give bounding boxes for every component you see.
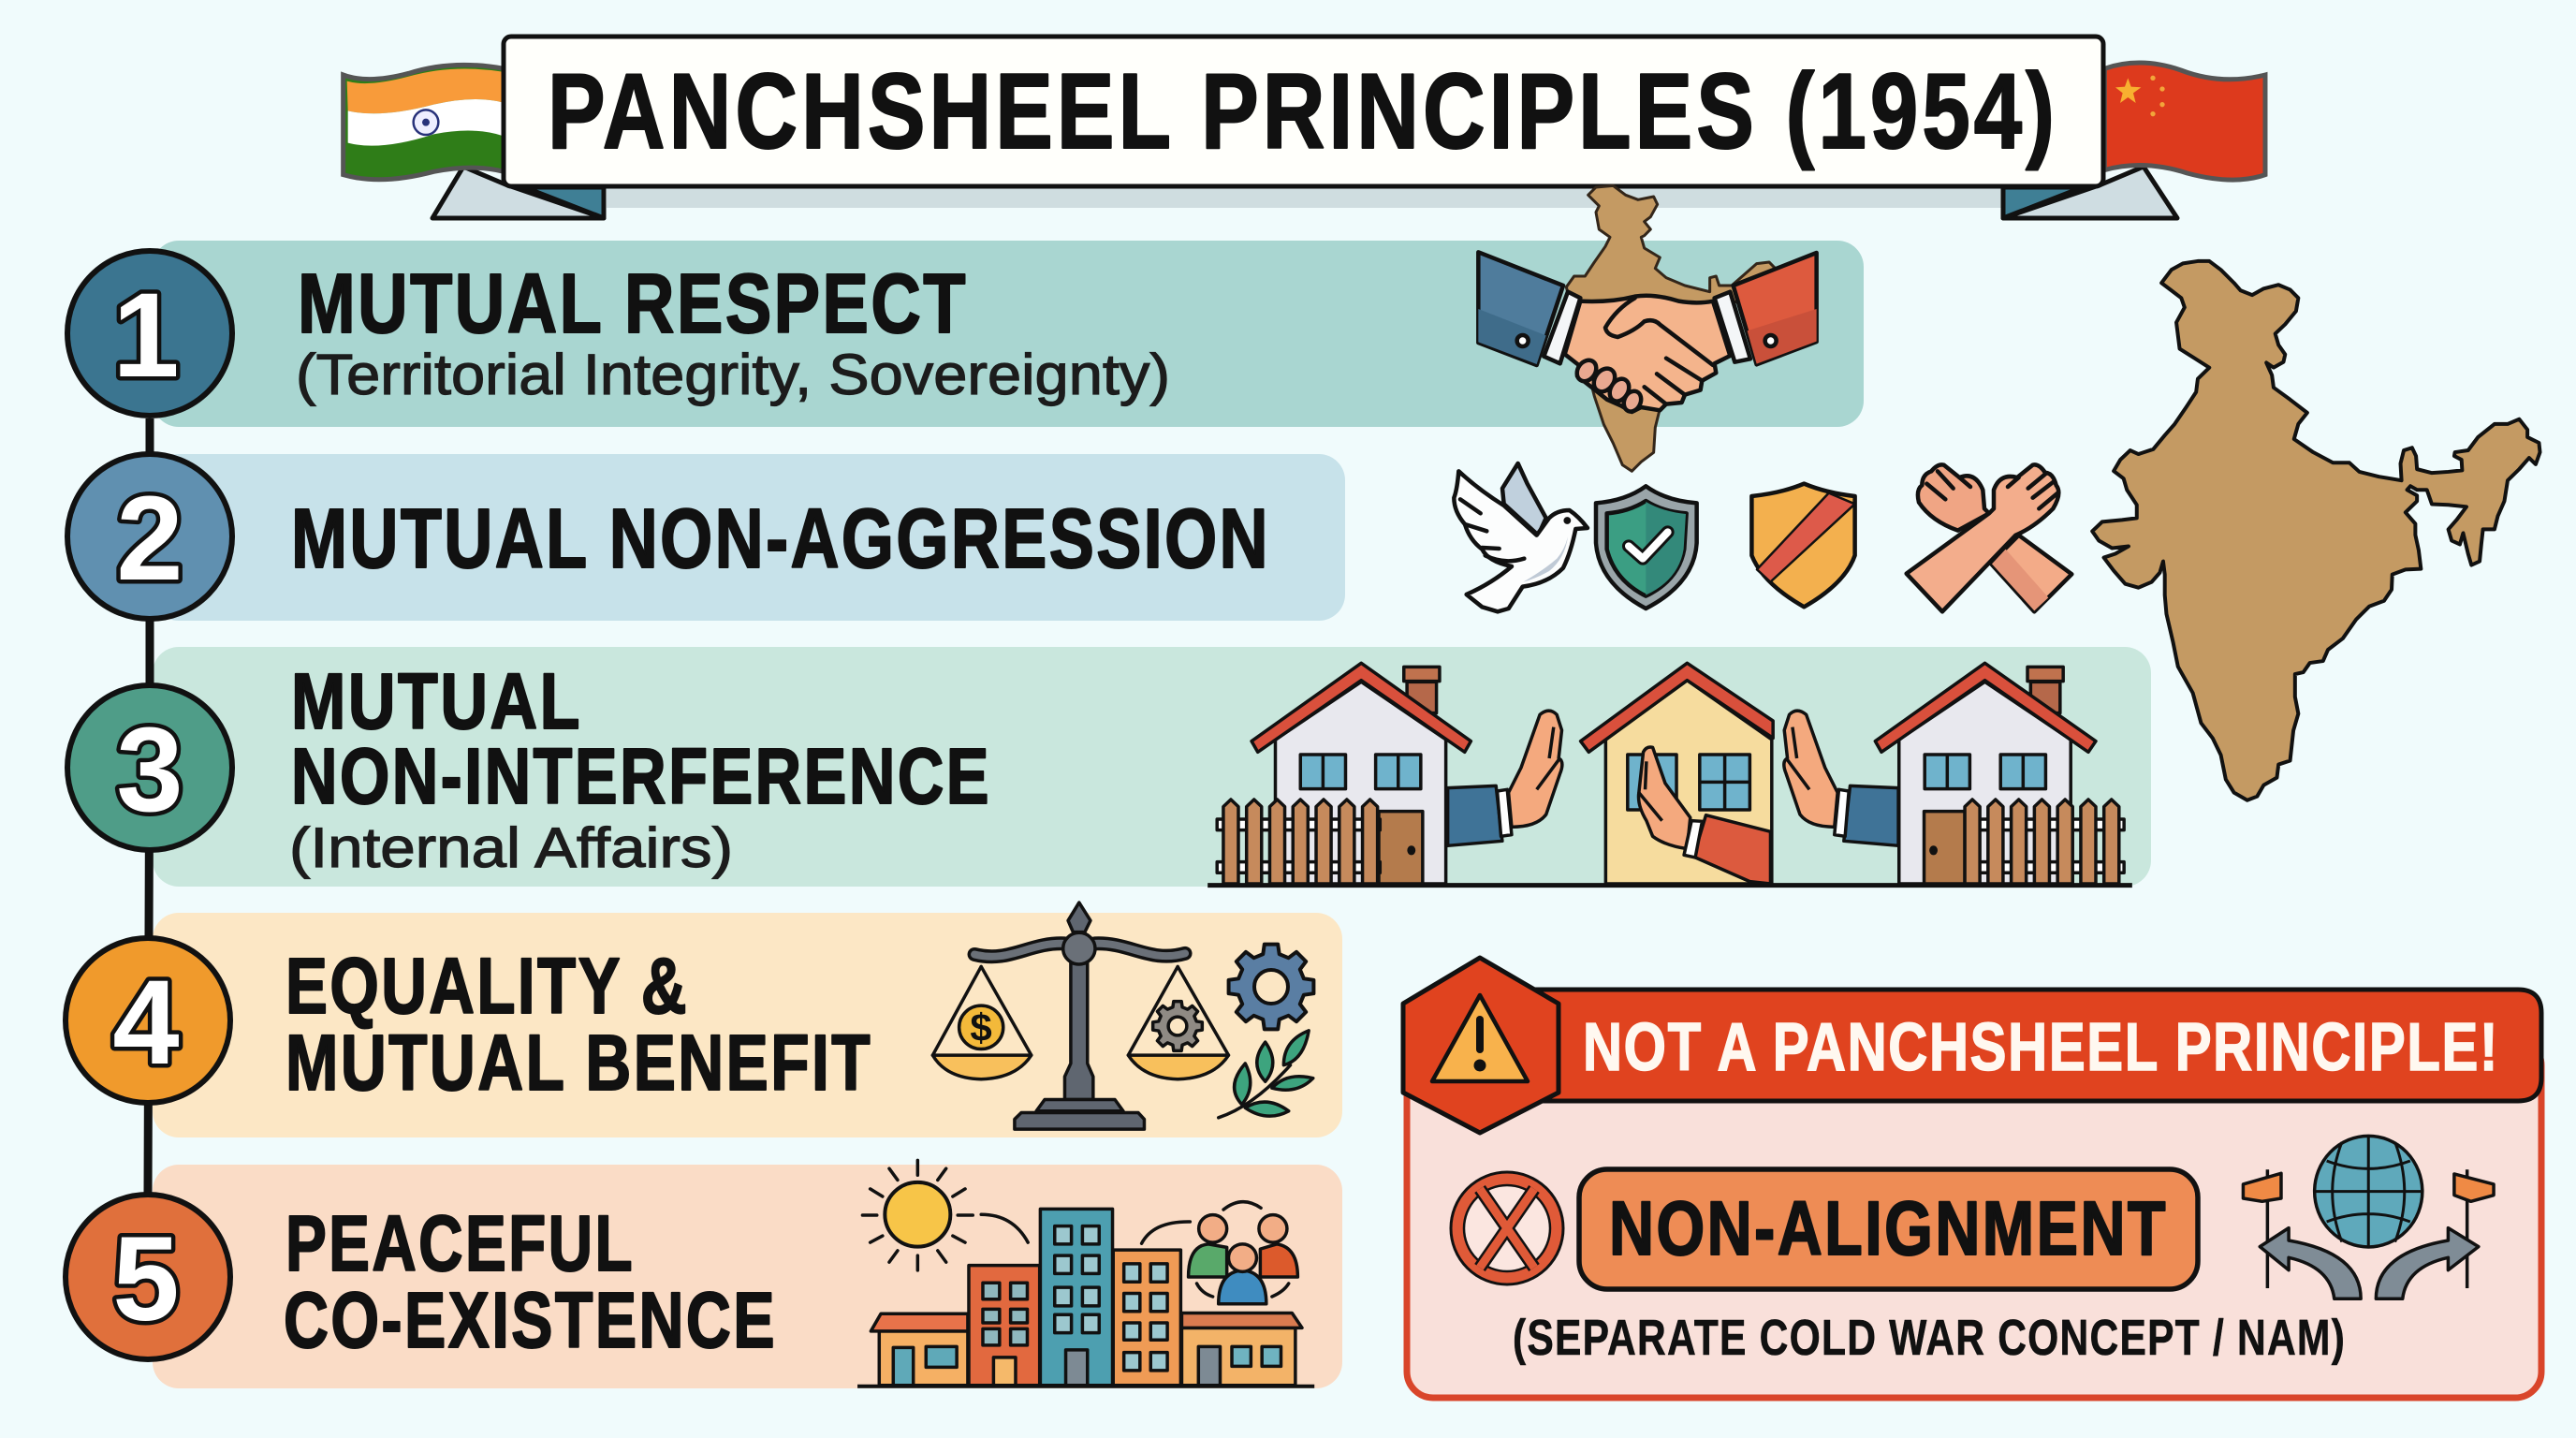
dollar sign: $ — [970, 1005, 992, 1049]
icon: China flag — [2104, 63, 2265, 180]
title box — [504, 37, 2103, 186]
icon: crossed arms — [1907, 464, 2071, 611]
right arm stop hand — [1784, 711, 1898, 845]
icon: warning triangle — [1432, 995, 1528, 1081]
callout: not a Panchsheel principle — [1403, 958, 2541, 1398]
title text: PANCHSHEEL PRINCIPLES (1954) — [548, 52, 2058, 171]
left arm stop hand — [1448, 711, 1562, 845]
icon: green shield with check — [1596, 486, 1697, 609]
panel 2: mutual non-aggression — [153, 454, 1345, 621]
icon: houses with stop hands — [1208, 663, 2132, 886]
clasped hands — [1565, 296, 1730, 412]
panel 1 subtitle: (Territorial Integrity, Sovereignty) — [296, 343, 1170, 406]
icon: crossed circle — [1451, 1172, 1563, 1284]
number badge 1 — [67, 251, 232, 416]
number badge 2: 2 — [116, 472, 183, 606]
ground line — [1208, 883, 2132, 888]
number badge 3 — [67, 685, 232, 850]
icon: city buildings — [857, 1209, 1314, 1387]
number badge 2 — [67, 454, 232, 619]
left house — [1217, 663, 1471, 884]
red sleeve — [1734, 253, 1817, 364]
icon: India flag — [344, 65, 504, 180]
panel 2 heading: MUTUAL NON-AGGRESSION — [291, 492, 1270, 586]
beam — [974, 944, 1185, 957]
teal tower — [1040, 1209, 1113, 1386]
orange building — [1113, 1250, 1180, 1386]
base — [1064, 963, 1093, 1100]
panel 3 subtitle: (Internal Affairs) — [289, 816, 733, 879]
flag poles — [2267, 1169, 2467, 1288]
callout note: (SEPARATE COLD WAR CONCEPT / NAM) — [1513, 1310, 2346, 1366]
right house — [1875, 663, 2124, 884]
icon: community people — [1142, 1202, 1297, 1304]
panel 3: mutual non-interference — [153, 647, 2151, 887]
right pan — [1128, 966, 1228, 1055]
title banner — [344, 37, 2265, 218]
ribbon shadow band — [607, 187, 2001, 208]
panel 4: equality and mutual benefit: MUTUAL BENEFIT — [285, 1019, 872, 1107]
panel 3: mutual non-interference: NON-INTERFERENCE — [291, 732, 991, 820]
finial — [1068, 902, 1090, 932]
panel 3 heading: MUTUAL — [291, 657, 582, 745]
panel 4 heading: EQUALITY & — [285, 942, 689, 1030]
panel 5 heading: PEACEFUL — [285, 1199, 635, 1287]
number badge 3: 3 — [116, 703, 183, 837]
panel 4: equality and mutual benefit — [153, 913, 1342, 1137]
panel 2 background — [153, 454, 1345, 621]
number badge 4 — [66, 938, 230, 1103]
center house — [1581, 663, 1773, 884]
panel 1: mutual respect — [153, 241, 1864, 427]
red sleeve button — [1765, 335, 1777, 346]
number badge 1: 1 — [112, 269, 180, 403]
diverging arrows — [2260, 1228, 2361, 1299]
vertical spine connecting numbers — [148, 418, 150, 1193]
small gear — [1153, 1002, 1202, 1050]
panel 5 background — [153, 1165, 1342, 1388]
icon: handshake — [1478, 252, 1817, 415]
red building — [969, 1266, 1040, 1386]
left pan — [932, 966, 1032, 1055]
left cuff — [1544, 292, 1580, 363]
panel 1 background — [153, 241, 1864, 427]
number badge 5: 5 — [112, 1212, 180, 1346]
icon: small India map behind handshake — [1566, 185, 1776, 471]
ground line — [857, 1385, 1314, 1388]
ribbon folds — [432, 167, 2177, 218]
icon: orange shield with stripe — [1751, 484, 1855, 607]
blue sleeve — [1478, 252, 1563, 365]
icon: balance scale — [932, 902, 1228, 1129]
icon: sun — [862, 1160, 1028, 1270]
icon: globe with diverging paths — [2243, 1136, 2494, 1299]
hexagon badge — [1403, 958, 1559, 1133]
non-alignment label: NON-ALIGNMENT — [1609, 1186, 2168, 1271]
number badge 5 — [66, 1195, 230, 1359]
blue sleeve button — [1517, 335, 1529, 346]
right low building — [1181, 1313, 1302, 1386]
icon: blue gear — [1229, 945, 1313, 1029]
callout header bar — [1516, 990, 2541, 1101]
number badge 4: 4 — [112, 956, 180, 1090]
icon: large India map — [2092, 261, 2540, 800]
non-alignment pill — [1579, 1169, 2198, 1289]
icon: olive branch — [1219, 1031, 1313, 1118]
panel 4 background — [153, 913, 1342, 1137]
icon: dove — [1454, 463, 1588, 611]
callout body — [1407, 1039, 2541, 1398]
panel 5: peaceful co-existence: CO-EXISTENCE — [284, 1276, 777, 1364]
panel 5: peaceful co-existence — [153, 1165, 1342, 1388]
clasped fingers — [1573, 357, 1645, 415]
panel 1 heading: MUTUAL RESPECT — [298, 257, 968, 351]
right cuff — [1715, 292, 1750, 362]
panel 3 background — [153, 647, 2151, 887]
left low building — [871, 1313, 968, 1386]
